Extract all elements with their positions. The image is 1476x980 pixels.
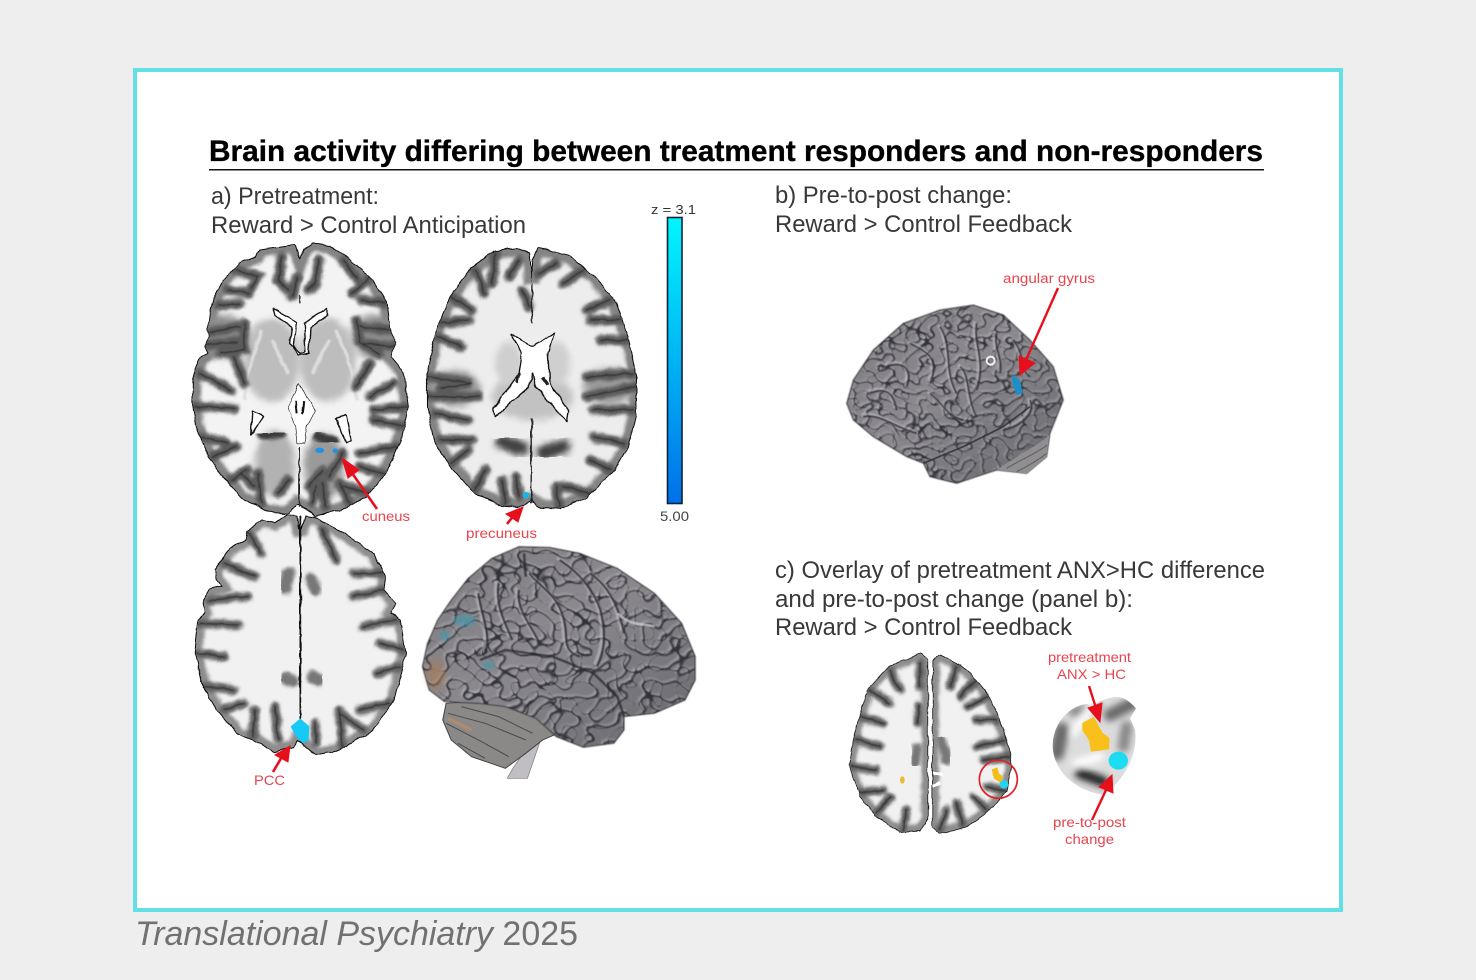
brain: axial slice 3 with PCC — [195, 515, 405, 755]
brainstem — [507, 742, 540, 778]
cyan pre-to-post cluster — [1109, 752, 1128, 770]
arrow: PCC — [273, 746, 290, 772]
heading: panel b: b) Pre-to-post change: — [775, 182, 1012, 209]
yellow pretreatment cluster — [1083, 718, 1108, 751]
colour bar: 5.00 — [660, 508, 689, 524]
red selection circle — [979, 760, 1017, 798]
heading: panel a: Reward > Control Anticipation — [211, 212, 526, 239]
title: Brain activity differing between treatment responders and non-responders — [209, 135, 1263, 168]
colour bar: z = 3.1 — [651, 202, 696, 217]
brain: lateral surface panel b — [847, 305, 1063, 483]
arrow: pre-to-post — [1092, 775, 1113, 820]
small yellow and cyan foci — [900, 776, 905, 784]
infographic page — [133, 68, 1343, 952]
arrow: angular gyrus — [1019, 288, 1058, 375]
source caption: Translational Psychiatry 2025 — [135, 915, 578, 953]
arrow: cuneus — [342, 458, 377, 509]
activation overlays — [439, 615, 495, 669]
label: angular gyrus: angular gyrus — [1003, 270, 1095, 286]
label: precuneus: precuneus — [466, 525, 537, 541]
brain: axial slice 1 with cuneus — [193, 243, 408, 515]
activation spot — [523, 492, 530, 499]
activation overlay — [1012, 375, 1023, 395]
brain: large lateral surface — [422, 547, 695, 778]
heading: panel c — [775, 557, 1265, 641]
label: pre-to-post change: pre-to-post — [1053, 814, 1126, 830]
label: pretreatment ANX > HC: ANX > HC — [1057, 666, 1126, 682]
activation blob — [291, 719, 309, 743]
heading: panel b — [775, 182, 1073, 238]
label: pre-to-post change: change — [1065, 831, 1114, 847]
brain: axial slice 2 with precuneus — [427, 248, 636, 508]
panel: white card with cyan border — [135, 70, 1341, 910]
lateral ventricles, frontal horns — [273, 308, 327, 355]
inset: zoomed cortex with overlap — [1052, 697, 1136, 795]
third ventricle and cistern — [288, 383, 316, 443]
arrow: pretreatment — [1088, 686, 1102, 722]
brain: axial slice panel c — [850, 653, 1017, 833]
arrow: precuneus — [506, 507, 523, 524]
heading: panel c: Reward > Control Feedback — [775, 614, 1073, 641]
heading: panel c: c) Overlay of pretreatment ANX>HC difference — [775, 557, 1265, 584]
heading: panel b: Reward > Control Feedback — [775, 211, 1073, 238]
activation spots — [315, 448, 338, 453]
label: pretreatment ANX > HC: pretreatment — [1048, 649, 1131, 665]
label: PCC: PCC — [254, 772, 285, 788]
label: cuneus: cuneus — [362, 508, 410, 524]
heading: panel a: a) Pretreatment: — [211, 183, 379, 210]
colour bar — [651, 202, 696, 524]
cerebellum — [443, 700, 558, 768]
label: pre-to-post change — [1053, 814, 1126, 847]
occipital horns — [251, 412, 351, 443]
arrows — [273, 288, 1113, 820]
lateral ventricles — [494, 333, 568, 422]
heading: panel a — [211, 183, 526, 239]
heading: panel c: and pre-to-post change (panel b): — [775, 586, 1133, 613]
label: pretreatment ANX > HC — [1048, 649, 1131, 682]
